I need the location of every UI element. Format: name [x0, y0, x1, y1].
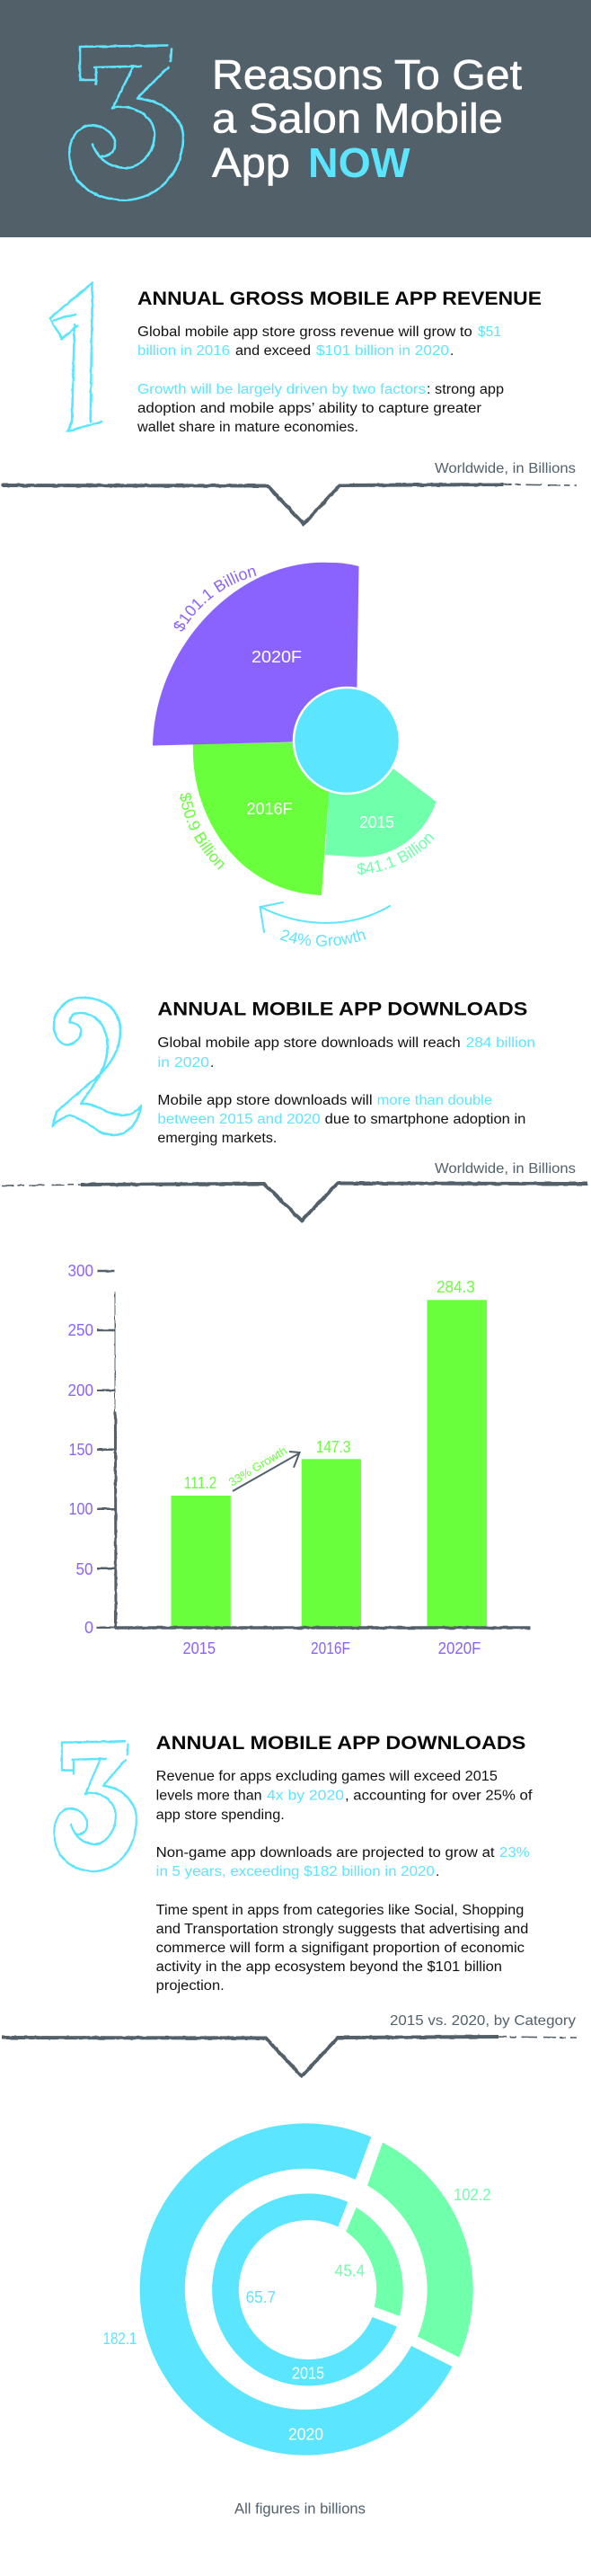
- heading: ANNUAL MOBILE APP DOWNLOADS: [157, 999, 527, 1019]
- divider with pointer 1: [2, 484, 577, 524]
- bar 2015: [171, 1474, 231, 1657]
- text block: app store spending.: [156, 1808, 285, 1823]
- label $41.1 Billion: $41.1 Billion: [357, 834, 435, 875]
- x axis: [115, 1626, 530, 1630]
- label 2020F: 2020F: [251, 648, 302, 666]
- icon: hand-drawn numeral 1: [49, 283, 101, 431]
- text block: levels more than: [156, 1789, 262, 1804]
- panel: section 1 text: [49, 283, 576, 476]
- text block: activity in the app ecosystem beyond the $101 billion: [156, 1959, 502, 1975]
- divider with pointer 2: [2, 1183, 587, 1221]
- value 45.4: 45.4: [335, 2262, 365, 2280]
- icon: hand-drawn numeral 3 small: [54, 1741, 137, 1871]
- bar 2020F: [428, 1278, 487, 1657]
- y axis: 300: [68, 1262, 93, 1280]
- text block: and exceed: [235, 343, 311, 359]
- y axis: 100: [68, 1500, 93, 1518]
- text block: .: [436, 1864, 439, 1879]
- title: NOW: [308, 139, 410, 186]
- chart note: Worldwide, in Billions: [435, 461, 576, 476]
- heading: ANNUAL MOBILE APP DOWNLOADS: [156, 1733, 525, 1754]
- text block: .: [210, 1055, 214, 1070]
- text block: billion in 2016: [137, 343, 230, 359]
- label $50.9 Billion: $50.9 Billion: [179, 793, 225, 870]
- text block: Time spent in apps from categories like Social, Shopping: [156, 1903, 524, 1918]
- title: App: [212, 139, 290, 186]
- icon: hand-drawn numeral 3: [69, 45, 183, 200]
- header panel: [0, 0, 591, 237]
- ring label 2015: 2015: [292, 2365, 324, 2383]
- sector 2015: [325, 741, 437, 857]
- text block: [137, 324, 504, 435]
- value 65.7: 65.7: [246, 2288, 276, 2306]
- text block: 23%: [499, 1845, 530, 1861]
- y axis: 50: [75, 1560, 93, 1578]
- bar 2020F: 2020F: [438, 1639, 481, 1657]
- text block: Mobile app store downloads will: [157, 1093, 373, 1108]
- text block: 4x by 2020: [267, 1789, 344, 1804]
- text block: Non-game app downloads are projected to grow at: [156, 1845, 495, 1861]
- value 182.1: 182.1: [103, 2330, 137, 2348]
- label 2015: 2015: [359, 813, 394, 831]
- sector 2020F: [153, 563, 359, 746]
- panel: section 2 text: [53, 998, 576, 1177]
- outer ring 2020: [140, 2123, 473, 2456]
- title: [212, 51, 522, 186]
- center circle: [294, 688, 400, 794]
- ring label 2020: 2020: [288, 2426, 323, 2444]
- divider with pointer 3: [2, 2037, 577, 2076]
- label $101.1 Billion: $101.1 Billion: [174, 568, 257, 631]
- icon: hand-drawn numeral 2: [53, 998, 141, 1135]
- text block: wallet share in mature economies.: [137, 420, 358, 435]
- text block: projection.: [156, 1978, 225, 1994]
- footnote: All figures in billions: [234, 2500, 366, 2518]
- bar 2020F: 284.3: [437, 1278, 475, 1296]
- text block: due to smartphone adoption in: [325, 1112, 525, 1127]
- text block: [157, 1035, 535, 1146]
- arrow: 33% growth: 33% Growth: [226, 1443, 289, 1489]
- text block: emerging markets.: [157, 1131, 277, 1146]
- chart: downloads bar chart: [68, 1262, 530, 1657]
- bar 2016F: 2016F: [311, 1639, 350, 1657]
- text block: Global mobile app store gross revenue will grow to: [137, 324, 472, 340]
- text block: .: [450, 343, 454, 359]
- text block: $101 billion in 2020: [316, 343, 449, 359]
- text block: more than double: [377, 1093, 492, 1108]
- chart: revenue radial pie: [153, 563, 437, 946]
- text block: between 2015 and 2020: [157, 1112, 321, 1127]
- label 24% Growth: 24% Growth: [280, 929, 366, 946]
- text block: 284 billion: [466, 1035, 535, 1051]
- title: a Salon Mobile: [212, 95, 503, 142]
- bar 2016F: [302, 1438, 361, 1657]
- text block: in 5 years, exceeding $182 billion in 2020: [156, 1864, 435, 1879]
- text block: in 2020: [157, 1055, 209, 1070]
- text block: commerce will form a signifigant proportion of economic: [156, 1941, 525, 1956]
- heading: ANNUAL GROSS MOBILE APP REVENUE: [137, 289, 542, 309]
- text block: [156, 1769, 533, 1994]
- text block: $51: [478, 324, 501, 340]
- title: Reasons To Get: [212, 51, 522, 98]
- bar 2016F: 147.3: [316, 1438, 350, 1456]
- y axis: 0: [84, 1619, 93, 1637]
- text block: adoption and mobile apps’ ability to capture greater: [137, 401, 481, 416]
- panel: section 3 text: [54, 1733, 576, 2029]
- value 102.2: 102.2: [454, 2186, 490, 2204]
- text block: Revenue for apps excluding games will exceed 2015: [156, 1769, 498, 1784]
- text block: and Transportation strongly suggests that advertising and: [156, 1922, 528, 1937]
- sector 2016F: [193, 741, 347, 895]
- y axis: [68, 1262, 116, 1637]
- text block: Global mobile app store downloads will reach: [157, 1035, 461, 1051]
- text block: , accounting for over 25% of: [345, 1789, 533, 1804]
- inner ring 2015: [212, 2193, 403, 2385]
- y axis: 200: [68, 1381, 93, 1399]
- y axis: 250: [68, 1321, 93, 1339]
- bar 2015: 2015: [183, 1639, 216, 1657]
- label 2016F: 2016F: [246, 800, 293, 818]
- chart note: 2015 vs. 2020, by Category: [390, 2013, 576, 2029]
- chart: concentric donut: [103, 2123, 490, 2456]
- arrow: 24% growth: [260, 902, 390, 932]
- bar 2015: 111.2: [184, 1474, 216, 1492]
- text block: : strong app: [427, 382, 504, 397]
- chart note: Worldwide, in Billions: [435, 1161, 576, 1177]
- text block: Growth will be largely driven by two factors: [137, 382, 426, 397]
- y axis: 150: [68, 1441, 93, 1459]
